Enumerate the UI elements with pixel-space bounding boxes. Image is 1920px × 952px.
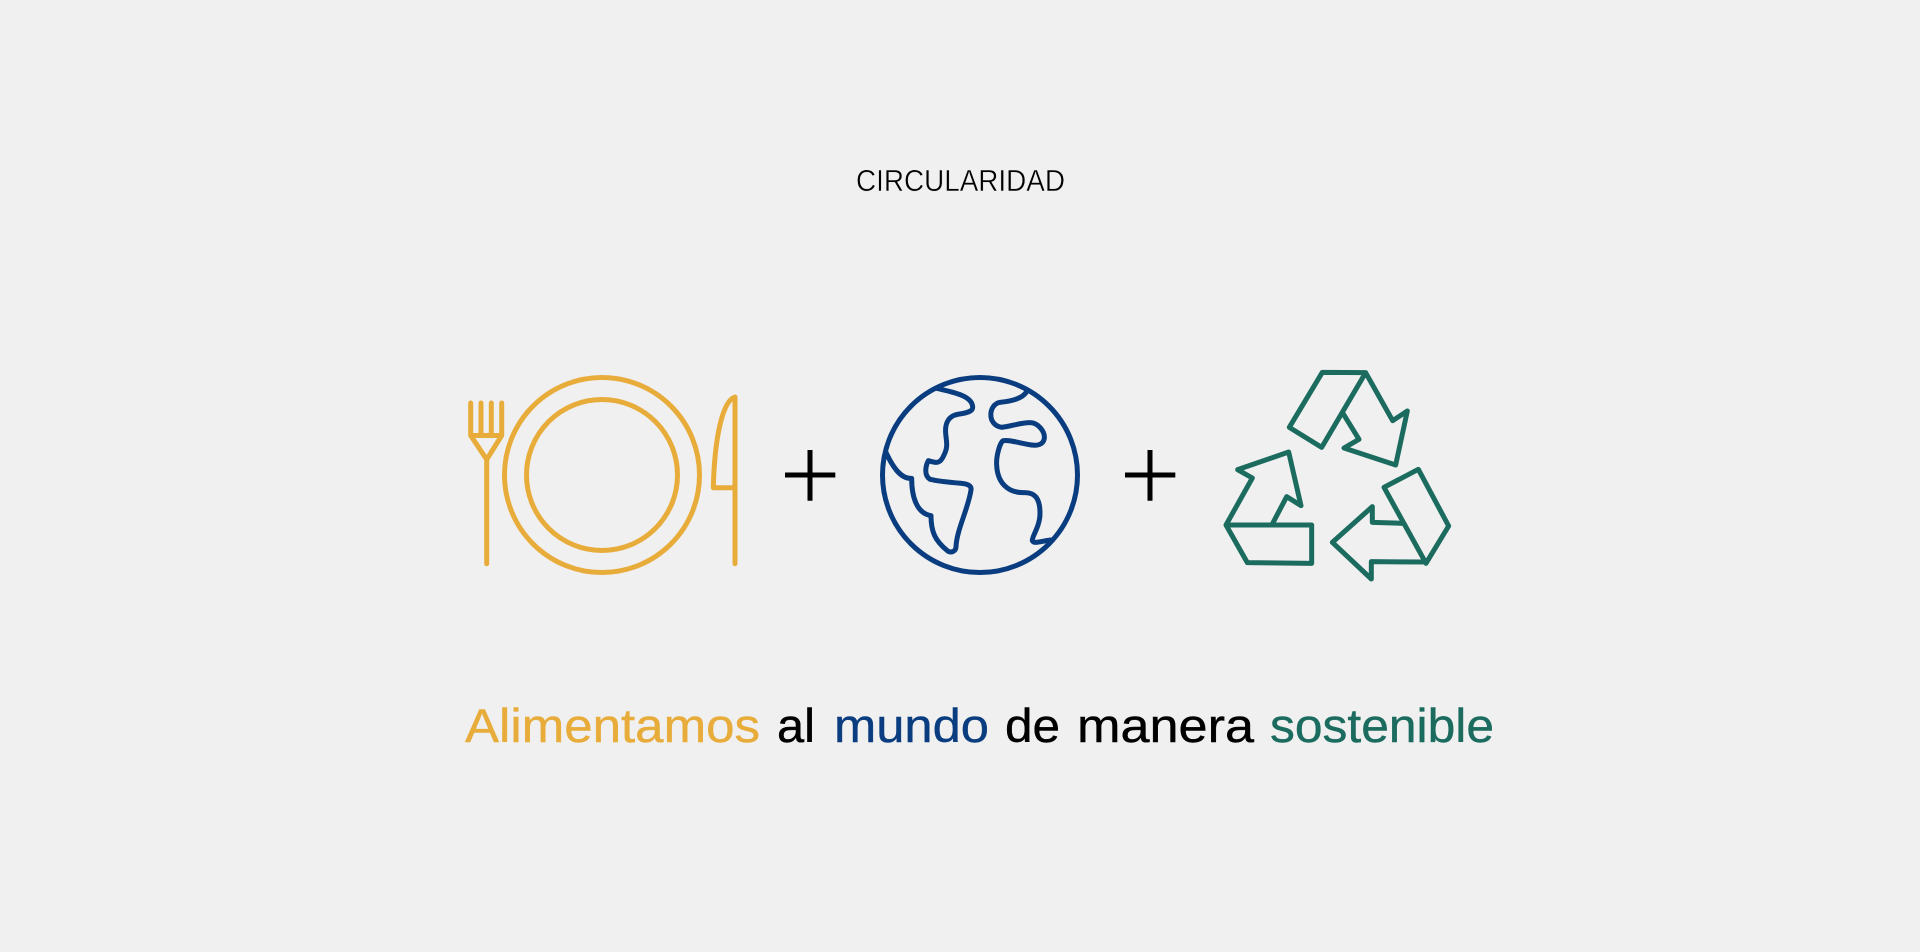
tagline: Alimentamos <box>465 699 760 752</box>
icon: plate with fork and knife <box>471 378 735 572</box>
tagline: al <box>777 699 815 752</box>
knife <box>713 397 735 564</box>
icon: recycling arrows <box>1226 372 1449 579</box>
tagline: sostenible <box>1270 699 1494 752</box>
plate <box>504 378 700 572</box>
globe outline <box>882 378 1078 572</box>
tagline: de <box>1005 699 1060 752</box>
icon: globe <box>882 378 1078 572</box>
continents <box>886 388 1051 552</box>
top arrow <box>1289 372 1407 465</box>
tagline: manera <box>1077 699 1255 752</box>
left arrow <box>1226 452 1312 563</box>
plus sign 1 <box>785 450 835 501</box>
right arrow <box>1332 469 1449 579</box>
tagline: mundo <box>834 699 989 752</box>
title: CIRCULARIDAD <box>856 163 1065 198</box>
plus sign 2 <box>1125 450 1175 501</box>
tagline <box>465 699 1494 752</box>
fork <box>471 403 502 564</box>
